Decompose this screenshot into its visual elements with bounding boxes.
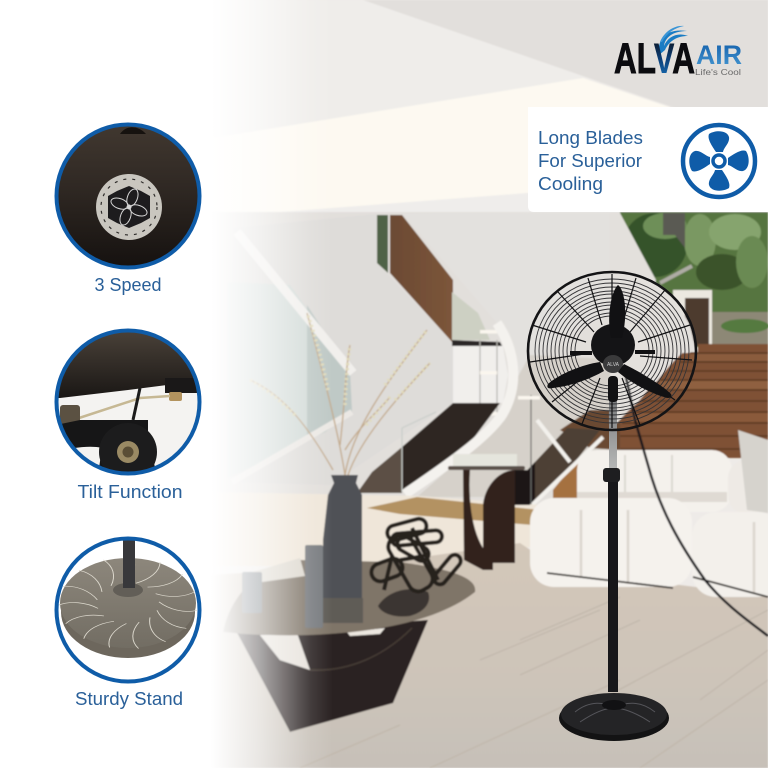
coffee table base [237, 620, 428, 732]
curved white stair stringer [405, 323, 513, 494]
photo: tilt mechanism [58, 332, 198, 472]
callout text: Long Blades [538, 127, 643, 148]
vase [323, 475, 363, 623]
branches [250, 313, 430, 475]
ring [56, 124, 200, 268]
greenery [620, 212, 768, 347]
logo swoosh [659, 26, 688, 55]
second stair and glass [518, 395, 603, 520]
feature: sturdy stand [56, 538, 200, 709]
ring [56, 538, 200, 682]
fan blades [547, 285, 671, 402]
glass coffee table top [223, 560, 475, 635]
side table [448, 454, 530, 570]
stand fan product [528, 272, 696, 741]
callout text: For Superior [538, 150, 642, 171]
cream floor [210, 492, 540, 566]
dark marble stair [357, 403, 500, 493]
fan motor hub: ALVA [607, 362, 620, 368]
logo tagline: Life's Cool [695, 68, 741, 77]
fan grille [528, 272, 696, 430]
white fade over left of photo [0, 0, 370, 768]
book and cup on table [242, 545, 323, 628]
sculpture reflection [378, 589, 429, 617]
wooden stairs [560, 344, 768, 458]
label: 3 speed: 3 Speed [94, 275, 162, 295]
icon: fan [683, 125, 755, 197]
power cable [625, 372, 768, 636]
sofa [530, 430, 768, 597]
fan base [559, 693, 669, 741]
callout: long blades [528, 107, 768, 212]
metal knot sculpture [369, 517, 463, 595]
terrace railing and cabin [610, 213, 712, 346]
photo: round stand base [58, 540, 197, 658]
logo wordmark AIR: AIR [696, 40, 742, 70]
label: tilt function: Tilt Function [78, 482, 182, 502]
callout text [538, 127, 643, 194]
logo wordmark ALVA: ALVA [614, 35, 695, 83]
label: sturdy stand: Sturdy Stand [75, 689, 183, 709]
fan motor hub [591, 324, 635, 373]
fan pole [603, 398, 620, 692]
carpet floor [210, 543, 768, 768]
ring [56, 330, 200, 474]
photo: speed dial [56, 124, 200, 268]
staircase wall [200, 193, 768, 512]
wood panel and window [377, 215, 508, 416]
callout panel [528, 107, 768, 212]
ceiling panels [200, 0, 768, 220]
pale wall seen through fan grille [610, 270, 696, 423]
callout text: Cooling [538, 173, 603, 194]
feature: 3 speed [56, 124, 200, 295]
logo: Alva Air [614, 26, 742, 83]
feature: tilt function [56, 326, 200, 502]
